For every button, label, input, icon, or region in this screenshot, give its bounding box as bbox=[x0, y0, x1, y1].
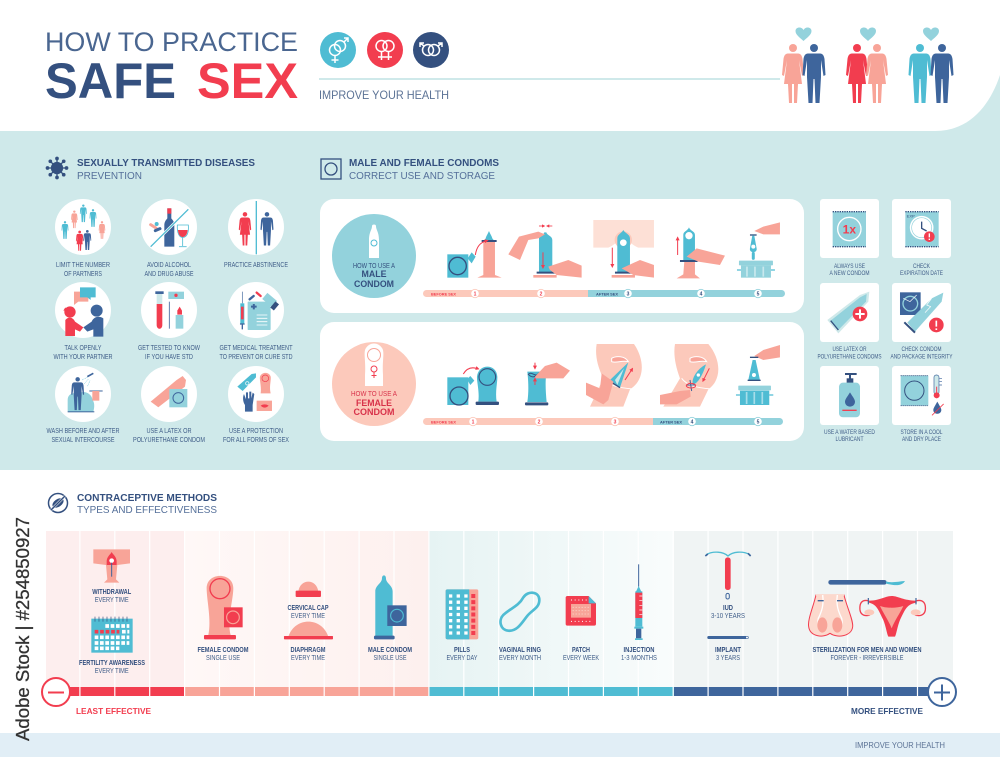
tile: water based lubricant bbox=[820, 366, 879, 443]
method: diaphragm: DIAPHRAGM bbox=[290, 645, 326, 654]
tip: wash bbox=[46, 366, 120, 444]
tip: practice abstinence bbox=[224, 199, 288, 269]
title bbox=[45, 27, 298, 109]
timeline: male condom steps: 1 bbox=[474, 291, 477, 297]
tip: protection for all forms of sex: FOR ALL FORMS OF SEX bbox=[223, 435, 289, 444]
couple: two men bbox=[908, 27, 954, 103]
tile: always use a new condom: 1x bbox=[843, 222, 856, 236]
footer text: IMPROVE YOUR HEALTH bbox=[855, 740, 945, 750]
tip: talk openly: WITH YOUR PARTNER bbox=[54, 352, 112, 361]
badge: male condom: MALE bbox=[362, 269, 386, 280]
icon: condom package bbox=[321, 159, 341, 179]
method: vaginal ring: VAGINAL RING bbox=[499, 645, 541, 654]
method: sterilization bbox=[808, 580, 925, 662]
panel: how to use a male condom bbox=[320, 199, 804, 313]
method: pills: EVERY DAY bbox=[446, 653, 478, 662]
method: cervical cap: CERVICAL CAP bbox=[288, 603, 329, 612]
title: HOW TO PRACTICE bbox=[45, 27, 298, 57]
method: vaginal ring: EVERY MONTH bbox=[499, 653, 541, 662]
method: cervical cap bbox=[288, 582, 329, 620]
tip: use latex condom: USE A LATEX OR bbox=[146, 426, 192, 435]
tip: limit partners: OF PARTNERS bbox=[64, 269, 102, 278]
tip: wash: WASH BEFORE AND AFTER bbox=[46, 426, 120, 435]
tile: check condom and package integrity: CHECK CONDOM bbox=[902, 346, 942, 353]
method: male condom bbox=[368, 575, 412, 662]
method: IUD: IUD bbox=[723, 603, 734, 612]
method: patch: PATCH bbox=[572, 645, 590, 654]
panel: STD prevention tips bbox=[46, 199, 293, 444]
method: vaginal ring bbox=[499, 593, 541, 662]
chart background zones bbox=[46, 531, 953, 687]
icon: no contraception symbol bbox=[48, 494, 68, 512]
tip: use latex condom: POLYURETHANE CONDOM bbox=[133, 435, 205, 444]
timeline: male condom steps: BEFORE SEX bbox=[431, 292, 456, 296]
badge: male condom: HOW TO USE A bbox=[353, 261, 395, 270]
tip: get tested: GET TESTED TO KNOW bbox=[138, 343, 200, 352]
tip: protection for all forms of sex: USE A PROTECTION bbox=[229, 426, 283, 435]
timeline: female condom steps: AFTER SEX bbox=[660, 420, 682, 424]
tip: medical treatment: TO PREVENT OR CURE STD bbox=[220, 352, 292, 361]
tile: check condom and package integrity: AND PACKAGE INTEGRITY bbox=[890, 354, 953, 360]
badge: female condom: CONDOM bbox=[354, 407, 395, 418]
heading: sexually transmitted diseases bbox=[77, 157, 255, 182]
method: cervical cap: EVERY TIME bbox=[291, 611, 325, 620]
timeline: male condom steps bbox=[423, 289, 785, 298]
method: withdrawal bbox=[92, 549, 132, 604]
timeline: male condom steps: 3 bbox=[627, 291, 630, 297]
title: SEX bbox=[197, 53, 298, 109]
subtitle: IMPROVE YOUR HEALTH bbox=[319, 88, 449, 102]
method: male condom: SINGLE USE bbox=[374, 653, 407, 662]
method: sterilization: FOREVER - IRREVERSIBLE bbox=[830, 653, 904, 662]
badge: male condom: CONDOM bbox=[354, 279, 394, 290]
tile: use latex condoms: USE LATEX OR bbox=[832, 346, 867, 353]
effectiveness bar bbox=[45, 687, 939, 696]
method: injection: 1-3 MONTHS bbox=[621, 653, 657, 662]
tile: water based lubricant: LUBRICANT bbox=[836, 436, 864, 443]
tile: store in a cool and dry place: STORE IN A COOL bbox=[900, 429, 943, 436]
tip: medical treatment: GET MEDICAL TREATMENT bbox=[220, 343, 293, 352]
method: IUD: 3-10 YEARS bbox=[711, 611, 745, 620]
header divider bbox=[319, 78, 780, 80]
heading: male and female condoms: MALE AND FEMALE CONDOMS bbox=[349, 157, 499, 169]
timeline: male condom steps: 2 bbox=[540, 291, 543, 297]
icon: lesbian symbol bbox=[367, 32, 403, 68]
tip: protection for all forms of sex bbox=[223, 366, 289, 444]
tip: limit partners bbox=[55, 199, 111, 278]
step 5: dispose bbox=[736, 345, 780, 405]
method: female condom: FEMALE CONDOM bbox=[198, 645, 248, 654]
method: IUD bbox=[705, 552, 751, 620]
panel: condom usage tips bbox=[818, 199, 953, 443]
tile: always use a new condom bbox=[820, 199, 879, 277]
tip: medical treatment bbox=[220, 282, 293, 361]
tip: talk openly bbox=[54, 282, 112, 361]
method: female condom: SINGLE USE bbox=[206, 653, 240, 662]
method: patch: EVERY WEEK bbox=[563, 653, 599, 662]
chart: contraceptive effectiveness scale bbox=[42, 531, 956, 716]
step 4: remove bbox=[660, 344, 718, 407]
step 5: dispose bbox=[737, 222, 780, 278]
badge: female condom: HOW TO USE A bbox=[351, 389, 397, 398]
badge: male condom bbox=[332, 214, 416, 298]
badge: female condom bbox=[332, 342, 416, 426]
heading: contraceptive methods: TYPES AND EFFECTIVENESS bbox=[77, 504, 217, 516]
step 1: open package bbox=[447, 231, 502, 278]
tile: check condom and package integrity bbox=[890, 283, 953, 360]
timeline: female condom steps: BEFORE SEX bbox=[431, 420, 456, 424]
icon: heterosexual symbol bbox=[320, 32, 356, 68]
timeline: female condom steps: 4 bbox=[691, 419, 694, 425]
method: withdrawal: EVERY TIME bbox=[95, 595, 129, 604]
tile: check expiration date: CHECK bbox=[913, 263, 931, 270]
couple: two women bbox=[846, 27, 888, 103]
plus button bbox=[928, 678, 956, 706]
tile: check expiration date bbox=[892, 199, 951, 277]
step 3: after sex hold the ring bbox=[593, 220, 654, 278]
tile: check expiration date: EXP bbox=[907, 214, 915, 219]
tip: avoid alcohol and drugs bbox=[141, 199, 197, 278]
label: least effective: LEAST EFFECTIVE bbox=[76, 706, 151, 716]
timeline: female condom steps: 5 bbox=[757, 419, 760, 425]
panel: how to use a female condom bbox=[320, 322, 804, 441]
heading: sexually transmitted diseases: PREVENTION bbox=[77, 170, 142, 182]
footer band bbox=[0, 733, 1000, 757]
heading: contraceptive methods bbox=[77, 492, 217, 516]
heading: sexually transmitted diseases: SEXUALLY TRANSMITTED DISEASES bbox=[77, 157, 255, 169]
tip: avoid alcohol and drugs: AVOID ALCOHOL bbox=[147, 260, 191, 269]
tile: water based lubricant: USE A WATER BASED bbox=[824, 429, 875, 436]
method: fertility awareness: EVERY TIME bbox=[95, 666, 129, 675]
tip: avoid alcohol and drugs: AND DRUG ABUSE bbox=[144, 269, 194, 278]
step 2: pinch and roll bbox=[508, 226, 582, 278]
timeline: male condom steps: AFTER SEX bbox=[596, 292, 618, 296]
panel: teal background bbox=[0, 75, 1000, 470]
tip: get tested bbox=[138, 282, 200, 361]
step 2: pinch inner ring bbox=[525, 363, 570, 405]
tile: store in a cool and dry place: AND DRY PLACE bbox=[902, 436, 941, 443]
tip: wash: SEXUAL INTERCOURSE bbox=[52, 435, 115, 444]
method: withdrawal: WITHDRAWAL bbox=[92, 587, 132, 596]
badge: female condom: FEMALE bbox=[356, 398, 392, 409]
minus button bbox=[42, 678, 70, 706]
method: injection bbox=[621, 564, 657, 662]
female condom steps illustrations bbox=[447, 363, 570, 405]
method: sterilization: STERILIZATION FOR MEN AND WOMEN bbox=[812, 645, 922, 654]
tile: use latex condoms bbox=[818, 283, 882, 360]
label: more effective: MORE EFFECTIVE bbox=[851, 706, 923, 716]
tile: always use a new condom: A NEW CONDOM bbox=[830, 270, 870, 277]
heading: male and female condoms bbox=[349, 157, 499, 182]
tip: talk openly: TALK OPENLY bbox=[64, 343, 102, 352]
method: patch bbox=[563, 596, 599, 662]
tip: get tested: IF YOU HAVE STD bbox=[145, 352, 193, 361]
method: implant: IMPLANT bbox=[715, 645, 741, 654]
tip: practice abstinence: PRACTICE ABSTINENCE bbox=[224, 260, 288, 269]
tip: limit partners: LIMIT THE NUMBER bbox=[56, 260, 110, 269]
step 1: open package bbox=[447, 367, 499, 405]
timeline: female condom steps: 3 bbox=[614, 419, 617, 425]
method: pills bbox=[446, 589, 478, 662]
method: injection: INJECTION bbox=[624, 645, 654, 654]
method: female condom bbox=[198, 576, 248, 662]
heading: male and female condoms: CORRECT USE AND STORAGE bbox=[349, 170, 495, 182]
timeline: female condom steps: 2 bbox=[538, 419, 541, 425]
method: implant bbox=[707, 636, 749, 662]
tip: use latex condom bbox=[133, 366, 205, 444]
icon: virus bbox=[46, 157, 68, 179]
method: diaphragm bbox=[284, 622, 333, 662]
step 3: insert bbox=[586, 344, 642, 407]
tile: store in a cool and dry place bbox=[892, 366, 951, 443]
tile: use latex condoms: POLYURETHANE CONDOMS bbox=[818, 354, 882, 360]
method: pills: PILLS bbox=[454, 645, 470, 654]
timeline: male condom steps: 4 bbox=[700, 291, 703, 297]
timeline: female condom steps: 1 bbox=[472, 419, 475, 425]
timeline: male condom steps: 5 bbox=[757, 291, 760, 297]
method: male condom: MALE CONDOM bbox=[368, 645, 412, 654]
method: fertility awareness: FERTILITY AWARENESS bbox=[79, 658, 145, 667]
timeline: female condom steps bbox=[423, 417, 783, 426]
method: implant: 3 YEARS bbox=[716, 653, 740, 662]
stock id side label: Adobe Stock | #254850927 bbox=[13, 517, 33, 741]
method: fertility awareness bbox=[79, 617, 145, 675]
condom steps illustrations bbox=[447, 220, 780, 278]
step 4: withdraw bbox=[677, 227, 725, 278]
tile: check expiration date: EXPIRATION DATE bbox=[900, 270, 943, 277]
title: SAFE bbox=[45, 53, 176, 109]
icon: gay symbol bbox=[413, 32, 449, 68]
heading: contraceptive methods: CONTRACEPTIVE METHODS bbox=[77, 492, 217, 504]
couple: woman and man bbox=[782, 27, 826, 103]
method: diaphragm: EVERY TIME bbox=[291, 653, 325, 662]
tile: always use a new condom: ALWAYS USE bbox=[834, 263, 865, 270]
